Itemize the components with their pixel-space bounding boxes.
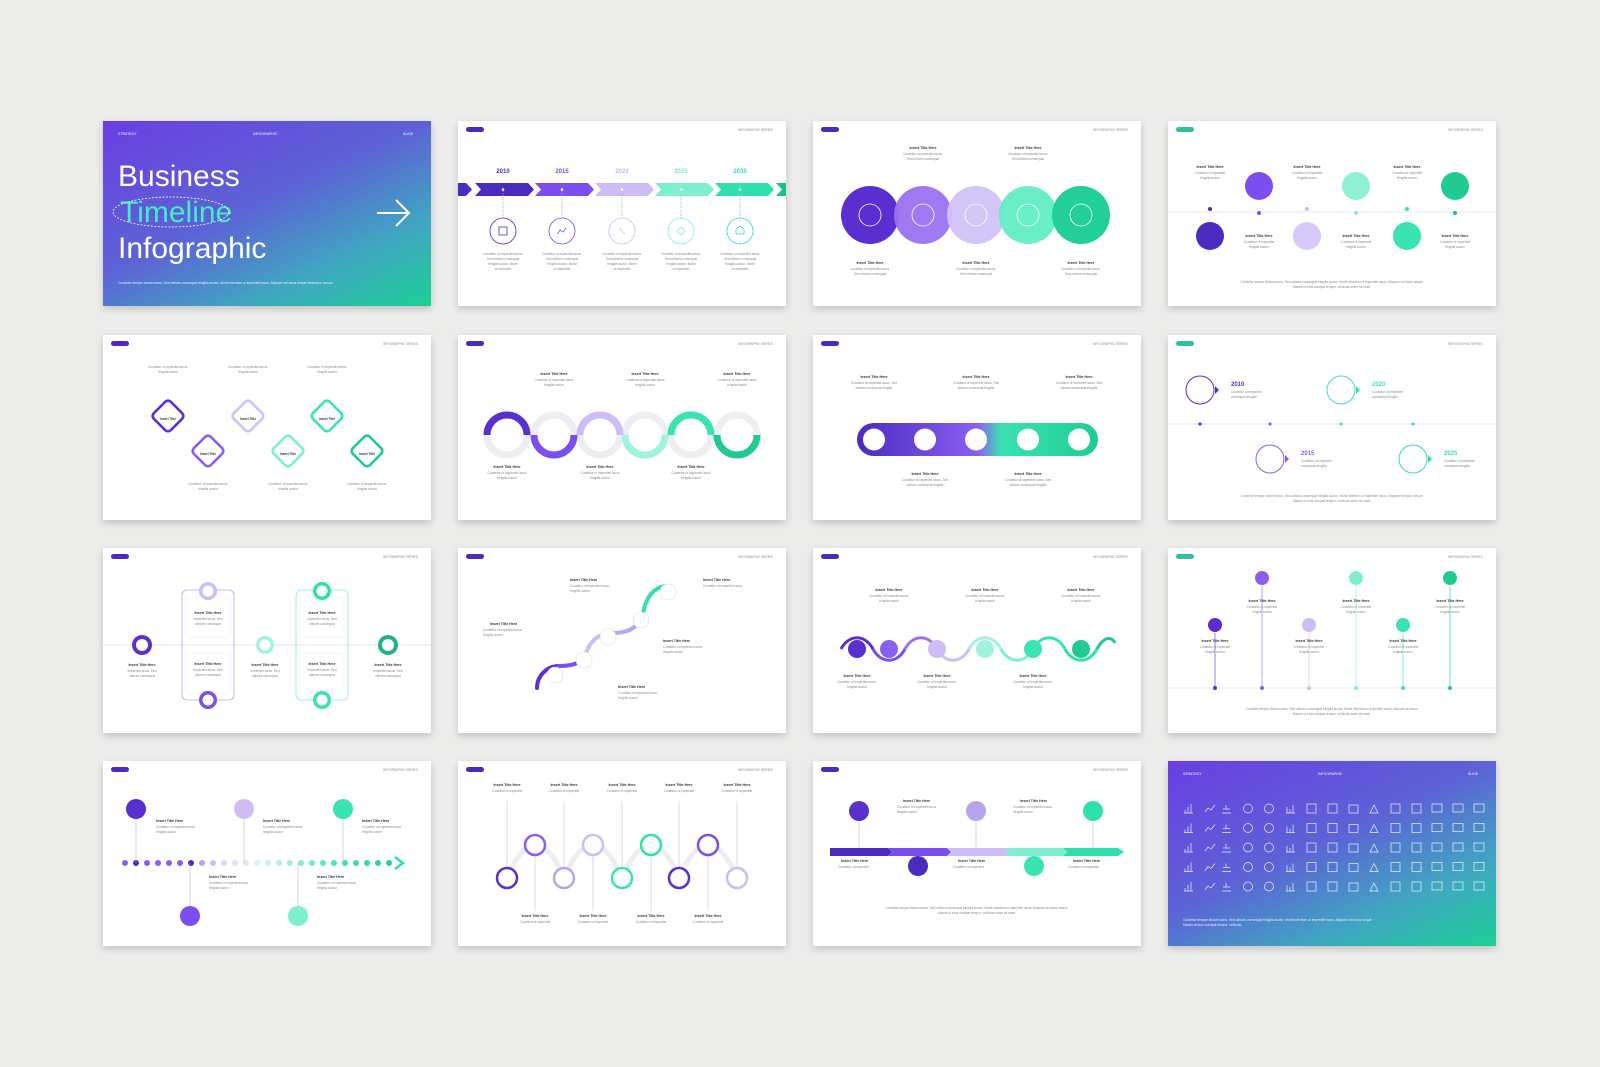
slide 5: diamonds: Insert Title xyxy=(240,417,256,421)
icon grid xyxy=(1184,804,1484,891)
slide 9: cards on line xyxy=(103,548,431,733)
slide 10: S curve: Curabitur ut imperdiet lacus xyxy=(703,584,742,588)
slide 3: big circles: Insert Title Here xyxy=(1014,146,1042,150)
slide 14: two rows of circles: Insert Title Here xyxy=(665,783,693,787)
slide 8: year circles: consequat fringilla xyxy=(1301,464,1327,468)
slide 4: alternating icons on line: Insert Title Here xyxy=(1441,234,1469,238)
slide 12: vertical pins: INFOGRAPHIC SERIES xyxy=(1448,555,1483,559)
slide 13: dotted arrow timeline: Insert Title Here xyxy=(156,819,183,823)
slide 5: diamonds: fringilla auctor xyxy=(317,370,338,374)
slide 6: wave rings: fringilla auctor xyxy=(727,383,748,387)
slide 9: cards on line: ultrices consequat xyxy=(195,622,221,626)
slide 9: cards on line: Insert Title Here xyxy=(374,663,402,667)
slide 9: cards on line: ultrices consequat xyxy=(252,674,278,678)
slide 16: icon set: INFOGRAPHIC xyxy=(1318,772,1343,776)
slide 7: pill bar: INFOGRAPHIC SERIES xyxy=(1093,342,1128,346)
slide 7: pill bar: ultrices consequat fringilla xyxy=(907,483,944,487)
slide 4: alternating icons on line: Insert Title Here xyxy=(1293,165,1321,169)
slide 15: arrow band with pins: Curabitur ut imperdiet lacus xyxy=(1013,805,1052,809)
slide 7: pill bar: ultrices consequat fringilla xyxy=(1010,483,1047,487)
slide 7: pill bar: Insert Title Here xyxy=(860,375,888,379)
slide 14: two rows of circles: Curabitur ut imperdiet xyxy=(520,920,550,924)
slide 14: two rows of circles: Curabitur ut imperdiet xyxy=(607,789,637,793)
slide 14: two rows of circles: Curabitur ut imperdiet xyxy=(549,789,579,793)
slide 10: S curve: Insert Title Here xyxy=(570,578,597,582)
slide 14: two rows of circles: Curabitur ut imperdiet xyxy=(664,789,694,793)
slide 6: wave rings: Curabitur ut imperdiet lacus xyxy=(672,471,711,475)
slide 12: vertical pins: Insert Title Here xyxy=(1389,639,1417,643)
slide 10: S curve: Curabitur ut imperdiet lacus xyxy=(483,628,522,632)
slide 12: vertical pins: fringilla auctor xyxy=(1440,610,1461,614)
slide 10: S curve: Curabitur ut imperdiet lacus xyxy=(663,645,702,649)
slide 12: vertical pins xyxy=(1168,548,1496,733)
slide 8: year circles: 2020 xyxy=(1372,382,1386,388)
slide 2: chevron timeline: Curabitur ut imperdiet lacus. xyxy=(483,252,523,256)
slide 13: dotted arrow timeline: Curabitur ut imperdiet lacus xyxy=(317,881,356,885)
slide 15: arrow band with pins: Insert Title Here xyxy=(1073,859,1100,863)
slide 15: arrow band with pins: fringilla auctor xyxy=(1013,810,1034,814)
slide 12: vertical pins: fringilla auctor xyxy=(1252,610,1273,614)
slide 5: diamonds: Curabitur ut imperdiet lacus. xyxy=(268,482,308,486)
years: 2010 xyxy=(496,169,510,175)
slide 13: dotted arrow timeline: Insert Title Here xyxy=(263,819,290,823)
slide 14: two rows of circles: Insert Title Here xyxy=(637,914,665,918)
slide 7: pill bar: Curabitur ut imperdiet lacus. Sed xyxy=(1056,381,1102,385)
slide 9: cards on line: ultrices consequat xyxy=(309,673,335,677)
slide 12: vertical pins: Insert Title Here xyxy=(1342,599,1370,603)
slide 7: pill bar xyxy=(813,335,1141,520)
arrow xyxy=(377,200,409,226)
slide 7: pill bar: ultrices consequat fringilla xyxy=(1061,386,1098,390)
slide 11: sine wave circles: INFOGRAPHIC SERIES xyxy=(1093,555,1128,559)
slide 9: cards on line: Insert Title Here xyxy=(194,611,222,615)
slide 15: arrow band with pins: Curabitur ut imperdiet xyxy=(838,865,869,869)
slide 13: dotted arrow timeline: fringilla auctor xyxy=(263,830,284,834)
slide 2: chevron timeline: Sed ultrices consequat xyxy=(606,257,638,261)
slide 10: S curve: fringilla auctor xyxy=(483,633,504,637)
slide 3: big circles: Sed ultrices consequat xyxy=(960,272,992,276)
slide 4: alternating icons on line: Curabitur ut imperdiet xyxy=(1392,171,1422,175)
description: Curabitur tempor dictum lacus. Sed ultrices consequat fringilla auctor. Morbi interdum ut imperdiet lacus. Aliquam vel lacus neque bibendum cursus. xyxy=(118,281,333,285)
slide 5: diamonds: Insert Title xyxy=(359,452,375,456)
slide 5: diamonds: Insert Title xyxy=(200,452,216,456)
slide 15: arrow band with pins: Insert Title Here xyxy=(958,859,985,863)
slide 9: cards on line: Imperdiet lacus. Sed xyxy=(250,669,280,673)
slide 3: big circles: Curabitur ut imperdiet lacus. xyxy=(903,152,943,156)
slide 10: S curve: Curabitur ut imperdiet lacus xyxy=(570,584,609,588)
slide 15: arrow band with pins xyxy=(813,761,1141,946)
slide 13: dotted arrow timeline: fringilla auctor xyxy=(317,886,338,890)
slide 14: two rows of circles: Insert Title Here xyxy=(493,783,521,787)
slide 11: sine wave circles: Curabitur ut imperdiet lacus. xyxy=(837,680,877,684)
slide 3: big circles: Curabitur ut imperdiet lacus. xyxy=(850,267,890,271)
slide 15: arrow band with pins: Mauris ut eros volutpat tempor, vehicula lorem sit amet. xyxy=(938,911,1016,915)
slide 16: icon set: SLIDE xyxy=(1468,772,1479,776)
slide 3: big circles: INFOGRAPHIC SERIES xyxy=(1093,128,1128,132)
slide 2: chevron timeline: ut imperdiet xyxy=(554,267,570,271)
slide 6: wave rings: Insert Title Here xyxy=(586,465,614,469)
slide 2: chevron timeline: fringilla auctor. Morbi xyxy=(666,262,696,266)
slide 6: wave rings: Curabitur ut imperdiet lacus xyxy=(488,471,527,475)
slide 2: chevron timeline: fringilla auctor. Morbi xyxy=(547,262,577,266)
slide 2: chevron timeline: INFOGRAPHIC SERIES xyxy=(738,128,773,132)
slide 11: sine wave circles: fringilla auctor xyxy=(1023,685,1044,689)
slide 4: alternating icons on line: Insert Title Here xyxy=(1245,234,1273,238)
slide 12: vertical pins: Insert Title Here xyxy=(1201,639,1229,643)
slide 9: cards on line: Insert Title Here xyxy=(308,611,336,615)
slide 11: sine wave circles: Insert Title Here xyxy=(923,674,951,678)
slide 13: dotted arrow timeline: Insert Title Here xyxy=(209,875,236,879)
slide 2: chevron timeline xyxy=(458,121,786,306)
slide 11: sine wave circles: fringilla auctor xyxy=(847,685,868,689)
slide 10: S curve: fringilla auctor xyxy=(618,696,639,700)
slide 5: diamonds: Curabitur ut imperdiet lacus. xyxy=(347,482,387,486)
slide 2: chevron timeline: fringilla auctor. Morbi xyxy=(488,262,518,266)
slide 14: two rows of circles: Insert Title Here xyxy=(579,914,607,918)
slide 8: year circles: Curabitur ut imperdiet xyxy=(1372,390,1403,394)
slide 6: wave rings: fringilla auctor xyxy=(590,476,611,480)
slide 5: diamonds xyxy=(103,335,431,520)
slide 5: diamonds: Insert Title xyxy=(319,417,335,421)
slide 10: S curve: Insert Title Here xyxy=(703,578,730,582)
slide 3: big circles: Curabitur ut imperdiet lacus. xyxy=(956,267,996,271)
slide 7: pill bar: Curabitur ut imperdiet lacus. Sed xyxy=(851,381,897,385)
slide 7: pill bar: Insert Title Here xyxy=(1065,375,1093,379)
slide 2: chevron timeline: ut imperdiet xyxy=(495,267,511,271)
slide 7: pill bar: Curabitur ut imperdiet lacus. Sed xyxy=(902,478,948,482)
slide 14: two rows of circles: Curabitur ut imperdiet xyxy=(693,920,723,924)
slide 9: cards on line: Imperdiet lacus. Sed xyxy=(307,668,337,672)
slide 12: vertical pins: Insert Title Here xyxy=(1295,639,1323,643)
slide 2: chevron timeline: ut imperdiet xyxy=(614,267,630,271)
slide 4: alternating icons on line: Insert Title Here xyxy=(1393,165,1421,169)
slide 12: vertical pins: Mauris ut eros volutpat tempor, vehicula lorem sit amet. xyxy=(1293,712,1371,716)
slide 6: wave rings xyxy=(458,335,786,520)
slide 11: sine wave circles: Curabitur ut imperdiet lacus. xyxy=(1013,680,1053,684)
slide 4: alternating icons on line: INFOGRAPHIC SERIES xyxy=(1448,128,1483,132)
slide 8: year circles: consequat fringilla xyxy=(1372,395,1398,399)
slide 1: cover: STRATEGY xyxy=(118,132,137,136)
chevron band xyxy=(458,183,786,196)
slide 7: pill bar: Insert Title Here xyxy=(962,375,990,379)
slide 2: chevron timeline: Sed ultrices consequat xyxy=(724,257,756,261)
slide 11: sine wave circles: fringilla auctor xyxy=(927,685,948,689)
slide 2: chevron timeline: fringilla auctor. Morbi xyxy=(607,262,637,266)
slide 4: alternating icons on line: fringilla auctor xyxy=(1346,245,1367,249)
slide 9: cards on line: Insert Title Here xyxy=(251,663,279,667)
slide 6: wave rings: fringilla auctor xyxy=(497,476,518,480)
slide 12: vertical pins: fringilla auctor xyxy=(1346,610,1367,614)
slide 10: S curve: Insert Title Here xyxy=(663,639,690,643)
slide 13: dotted arrow timeline: fringilla auctor xyxy=(156,830,177,834)
years xyxy=(496,169,747,175)
slide 11: sine wave circles: Curabitur ut imperdiet lacus. xyxy=(869,594,909,598)
slide 4: alternating icons on line: Curabitur ut imperdiet xyxy=(1195,171,1225,175)
slide 5: diamonds: fringilla auctor xyxy=(158,370,179,374)
slide 3: big circles xyxy=(813,121,1141,306)
slide 2: chevron timeline: Curabitur ut imperdiet lacus. xyxy=(720,252,760,256)
slide 5: diamonds: fringilla auctor xyxy=(278,487,299,491)
title: Timeline xyxy=(120,196,232,229)
slide 4: alternating icons on line: Curabitur ut imperdiet xyxy=(1244,240,1274,244)
slide 2: chevron timeline: fringilla auctor. Morbi xyxy=(725,262,755,266)
slide 14: two rows of circles: Insert Title Here xyxy=(550,783,578,787)
slide 4: alternating icons on line: Insert Title Here xyxy=(1342,234,1370,238)
slide 4: alternating icons on line: Curabitur ut imperdiet xyxy=(1292,171,1322,175)
slide 15: arrow band with pins: Insert Title Here xyxy=(841,859,868,863)
slide 12: vertical pins: Curabitur ut imperdiet xyxy=(1341,605,1371,609)
slide 4: alternating icons on line: fringilla auctor xyxy=(1397,176,1418,180)
slide 6: wave rings: fringilla auctor xyxy=(681,476,702,480)
slide 10: S curve: INFOGRAPHIC SERIES xyxy=(738,555,773,559)
slide 12: vertical pins: fringilla auctor xyxy=(1205,650,1226,654)
slide 8: year circles xyxy=(1168,335,1496,520)
slide 8: year circles: Curabitur ut imperdiet xyxy=(1444,459,1475,463)
years: 2030 xyxy=(733,169,747,175)
slide 3: big circles: Insert Title Here xyxy=(1067,261,1095,265)
slide 11: sine wave circles: Insert Title Here xyxy=(971,588,999,592)
slide 6: wave rings: Curabitur ut imperdiet lacus xyxy=(626,378,665,382)
slide 3: big circles: Curabitur ut imperdiet lacus. xyxy=(1061,267,1101,271)
slide 11: sine wave circles: Curabitur ut imperdiet lacus. xyxy=(965,594,1005,598)
slide 10: S curve: Curabitur ut imperdiet lacus xyxy=(618,691,657,695)
slide 6: wave rings: Insert Title Here xyxy=(493,465,521,469)
slide 11: sine wave circles: Insert Title Here xyxy=(843,674,871,678)
slide 7: pill bar: ultrices consequat fringilla xyxy=(856,386,893,390)
slide 2: chevron timeline: ut imperdiet xyxy=(732,267,748,271)
slide 13: dotted arrow timeline: Curabitur ut imperdiet lacus xyxy=(362,825,401,829)
slide 2: chevron timeline: Sed ultrices consequat xyxy=(546,257,578,261)
slide 12: vertical pins: fringilla auctor xyxy=(1299,650,1320,654)
slide 7: pill bar: Insert Title Here xyxy=(911,472,939,476)
slide 13: dotted arrow timeline: fringilla auctor xyxy=(209,886,230,890)
circles xyxy=(841,186,1110,244)
slide 3: big circles: Sed ultrices consequat xyxy=(907,157,939,161)
slide 5: diamonds: fringilla auctor xyxy=(238,370,259,374)
slide 6: wave rings: fringilla auctor xyxy=(635,383,656,387)
slide 9: cards on line: ultrices consequat xyxy=(195,673,221,677)
slide 5: diamonds: fringilla auctor xyxy=(198,487,219,491)
slide 13: dotted arrow timeline: Curabitur ut imperdiet lacus xyxy=(209,881,248,885)
slide 7: pill bar: Curabitur ut imperdiet lacus. Sed xyxy=(1005,478,1051,482)
slide 9: cards on line: ultrices consequat xyxy=(309,622,335,626)
years: 2015 xyxy=(555,169,569,175)
slide 6: wave rings: fringilla auctor xyxy=(544,383,565,387)
slide 12: vertical pins: Curabitur ut imperdiet xyxy=(1200,645,1230,649)
slide 1: cover xyxy=(103,121,431,306)
slide 16: icon set: Mauris ut eros volutpat tempor, vehicula. xyxy=(1183,923,1242,927)
slide 14: two rows of circles: Curabitur ut imperdiet xyxy=(636,920,666,924)
slide 8: year circles: 2025 xyxy=(1444,451,1458,457)
slide 1: cover: INFOGRAPHIC xyxy=(253,132,278,136)
slide 8: year circles: Curabitur ut imperdiet xyxy=(1231,390,1262,394)
slide 12: vertical pins: fringilla auctor xyxy=(1393,650,1414,654)
slide 2: chevron timeline: Curabitur ut imperdiet lacus. xyxy=(661,252,701,256)
slide 5: diamonds: Curabitur ut imperdiet lacus. xyxy=(307,365,347,369)
slide 4: alternating icons on line: fringilla auctor xyxy=(1249,245,1270,249)
slide 10: S curve: Insert Title Here xyxy=(490,622,517,626)
slide 14: two rows of circles: Curabitur ut imperdiet xyxy=(492,789,522,793)
slide 5: diamonds: Curabitur ut imperdiet lacus. xyxy=(188,482,228,486)
slide 11: sine wave circles: Insert Title Here xyxy=(1067,588,1095,592)
slide 2: chevron timeline: Sed ultrices consequat xyxy=(665,257,697,261)
slide 5: diamonds: fringilla auctor xyxy=(357,487,378,491)
slide 8: year circles: consequat fringilla xyxy=(1231,395,1257,399)
slide 4: alternating icons on line: fringilla auctor xyxy=(1200,176,1221,180)
slide 10: S curve: fringilla auctor xyxy=(570,589,591,593)
slide 14: two rows of circles xyxy=(458,761,786,946)
slide 12: vertical pins: Curabitur ut imperdiet xyxy=(1247,605,1277,609)
slide 3: big circles: Sed ultrices consequat xyxy=(854,272,886,276)
slide 9: cards on line: Imperdiet lacus. Sed xyxy=(373,669,403,673)
slide 11: sine wave circles: Insert Title Here xyxy=(875,588,903,592)
slide 12: vertical pins: Insert Title Here xyxy=(1436,599,1464,603)
slide 3: big circles: Curabitur ut imperdiet lacus. xyxy=(1008,152,1048,156)
slide 4: alternating icons on line: Curabitur ut imperdiet xyxy=(1440,240,1470,244)
slide 4: alternating icons on line: Insert Title Here xyxy=(1196,165,1224,169)
slide 11: sine wave circles: fringilla auctor xyxy=(975,599,996,603)
slide 7: pill bar: Curabitur ut imperdiet lacus. Sed xyxy=(953,381,999,385)
slide 3: big circles: Insert Title Here xyxy=(856,261,884,265)
slide 13: dotted arrow timeline: Curabitur ut imperdiet lacus xyxy=(156,825,195,829)
years: 2025 xyxy=(674,169,688,175)
slide 9: cards on line: Insert Title Here xyxy=(308,662,336,666)
slide 11: sine wave circles: fringilla auctor xyxy=(1071,599,1092,603)
slide 1: cover: SLIDE xyxy=(403,132,414,136)
slide 14: two rows of circles: INFOGRAPHIC SERIES xyxy=(738,768,773,772)
slide 10: S curve: fringilla auctor xyxy=(663,650,684,654)
years: 2020 xyxy=(615,169,629,175)
slide 5: diamonds: Insert Title xyxy=(160,417,176,421)
slide 4: alternating icons on line: Curabitur tempor dictum lacus. Sed ultrices consequat fringilla auctor. Morbi interdum ut imperdiet lacus. Aliquam vel lacus neque. xyxy=(1240,280,1424,284)
slide 11: sine wave circles xyxy=(813,548,1141,733)
slide 14: two rows of circles: Curabitur ut imperdiet xyxy=(578,920,608,924)
slide 2: chevron timeline: Sed ultrices consequat xyxy=(487,257,519,261)
slide 15: arrow band with pins: Insert Title Here xyxy=(903,799,930,803)
slide 10: S curve: Insert Title Here xyxy=(618,685,645,689)
slide 2: chevron timeline: ut imperdiet xyxy=(673,267,689,271)
slide 7: pill bar: Insert Title Here xyxy=(1014,472,1042,476)
slide 15: arrow band with pins: Curabitur ut imperdiet xyxy=(1068,865,1099,869)
slide 4: alternating icons on line: fringilla auctor xyxy=(1297,176,1318,180)
slide 6: wave rings: Insert Title Here xyxy=(677,465,705,469)
slide 2: chevron timeline: Curabitur ut imperdiet lacus. xyxy=(602,252,642,256)
slide 8: year circles: consequat fringilla xyxy=(1444,464,1470,468)
slide 8: year circles: 2015 xyxy=(1301,451,1315,457)
slide 3: big circles: Insert Title Here xyxy=(962,261,990,265)
slide 14: two rows of circles: Insert Title Here xyxy=(694,914,722,918)
slide 6: wave rings: Insert Title Here xyxy=(540,372,568,376)
slide 6: wave rings: Insert Title Here xyxy=(631,372,659,376)
slide 4: alternating icons on line: fringilla auctor xyxy=(1445,245,1466,249)
slide 15: arrow band with pins: Insert Title Here xyxy=(1020,799,1047,803)
slide 15: arrow band with pins: Curabitur tempor dictum lacus. Sed ultrices consequat fringilla auctor. Morbi interdum ut imperdiet lacus. Aliquam vel lacus neque. xyxy=(885,906,1069,910)
slide 14: two rows of circles: Insert Title Here xyxy=(723,783,751,787)
slide 5: diamonds: INFOGRAPHIC SERIES xyxy=(383,342,418,346)
slide 2: chevron timeline: Curabitur ut imperdiet lacus. xyxy=(542,252,582,256)
slide 9: cards on line: Imperdiet lacus. Sed xyxy=(127,669,157,673)
title: Business xyxy=(118,160,240,193)
slide 13: dotted arrow timeline: fringilla auctor xyxy=(362,830,383,834)
icon circles xyxy=(490,191,753,244)
slide 12: vertical pins: Curabitur ut imperdiet xyxy=(1435,605,1465,609)
slide 8: year circles: Curabitur ut imperdiet xyxy=(1301,459,1332,463)
slide 16: icon set: Curabitur tempor dictum lacus. Sed ultrices consequat fringilla auctor. Morbi interdum ut imperdiet lacus. Aliquam vel lacus neque. xyxy=(1183,918,1372,922)
slide 3: big circles: Sed ultrices consequat xyxy=(1065,272,1097,276)
slide 9: cards on line: ultrices consequat xyxy=(375,674,401,678)
slide 5: diamonds: Curabitur ut imperdiet lacus. xyxy=(228,365,268,369)
title xyxy=(113,160,266,265)
slide 9: cards on line: INFOGRAPHIC SERIES xyxy=(383,555,418,559)
slide 12: vertical pins: Curabitur ut imperdiet xyxy=(1388,645,1418,649)
slide 13: dotted arrow timeline: INFOGRAPHIC SERIES xyxy=(383,768,418,772)
slide 11: sine wave circles: Curabitur ut imperdiet lacus. xyxy=(917,680,957,684)
slide 4: alternating icons on line: Mauris ut eros volutpat tempor, vehicula lorem sit amet. xyxy=(1293,285,1371,289)
slide 3: big circles: Sed ultrices consequat xyxy=(1012,157,1044,161)
slide 6: wave rings: INFOGRAPHIC SERIES xyxy=(738,342,773,346)
slide 13: dotted arrow timeline: Insert Title Here xyxy=(362,819,389,823)
slide 11: sine wave circles: Curabitur ut imperdiet lacus. xyxy=(1061,594,1101,598)
slide 7: pill bar: ultrices consequat fringilla xyxy=(958,386,995,390)
slide 14: two rows of circles: Insert Title Here xyxy=(608,783,636,787)
slide 6: wave rings: Curabitur ut imperdiet lacus xyxy=(718,378,757,382)
slide 12: vertical pins: Curabitur tempor dictum lacus. Sed ultrices consequat fringilla auctor. Morbi interdum ut imperdiet lacus. Aliquam vel lacus. xyxy=(1245,707,1419,711)
slide 16: icon set: STRATEGY xyxy=(1183,772,1202,776)
slide 12: vertical pins: Curabitur ut imperdiet xyxy=(1294,645,1324,649)
slide 5: diamonds: Insert Title xyxy=(280,452,296,456)
slide 9: cards on line: Imperdiet lacus. Sed xyxy=(193,617,223,621)
slide 8: year circles: INFOGRAPHIC SERIES xyxy=(1448,342,1483,346)
slide 8: year circles: 2010 xyxy=(1231,382,1245,388)
slide 6: wave rings: Curabitur ut imperdiet lacus xyxy=(581,471,620,475)
slide 12: vertical pins: Insert Title Here xyxy=(1248,599,1276,603)
slide 3: big circles: Insert Title Here xyxy=(909,146,937,150)
slide 9: cards on line: Insert Title Here xyxy=(128,663,156,667)
slide 9: cards on line: Insert Title Here xyxy=(194,662,222,666)
slide 9: cards on line: ultrices consequat xyxy=(129,674,155,678)
slide 13: dotted arrow timeline: Insert Title Here xyxy=(317,875,344,879)
slide 15: arrow band with pins: INFOGRAPHIC SERIES xyxy=(1093,768,1128,772)
slide 9: cards on line: Imperdiet lacus. Sed xyxy=(307,617,337,621)
slide 9: cards on line: Imperdiet lacus. Sed xyxy=(193,668,223,672)
slide 15: arrow band with pins: Curabitur ut imperdiet lacus xyxy=(897,805,936,809)
slide 15: arrow band with pins: Curabitur ut imperdiet xyxy=(953,865,984,869)
slide 8: year circles: Curabitur tempor dictum lacus. Sed ultrices consequat fringilla auctor. Morbi interdum ut imperdiet lacus. Aliquam vel lacus neque. xyxy=(1240,494,1424,498)
slide 6: wave rings: Insert Title Here xyxy=(723,372,751,376)
slide 16: icon set xyxy=(1168,761,1496,946)
title: Infographic xyxy=(118,232,266,265)
slide 6: wave rings: Curabitur ut imperdiet lacus xyxy=(535,378,574,382)
slide 4: alternating icons on line xyxy=(1168,121,1496,306)
slide 11: sine wave circles: Insert Title Here xyxy=(1019,674,1047,678)
slide 8: year circles: Mauris ut eros volutpat tempor, vehicula lorem sit amet. xyxy=(1293,499,1371,503)
slide 13: dotted arrow timeline xyxy=(103,761,431,946)
slide 14: two rows of circles: Insert Title Here xyxy=(521,914,549,918)
slide 10: S curve xyxy=(458,548,786,733)
slide 13: dotted arrow timeline: Curabitur ut imperdiet lacus xyxy=(263,825,302,829)
slide 4: alternating icons on line: Curabitur ut imperdiet xyxy=(1341,240,1371,244)
slide 14: two rows of circles: Curabitur ut imperdiet xyxy=(722,789,752,793)
slide 5: diamonds: Curabitur ut imperdiet lacus. xyxy=(148,365,188,369)
slide 15: arrow band with pins: fringilla auctor xyxy=(897,810,918,814)
slide 11: sine wave circles: fringilla auctor xyxy=(879,599,900,603)
